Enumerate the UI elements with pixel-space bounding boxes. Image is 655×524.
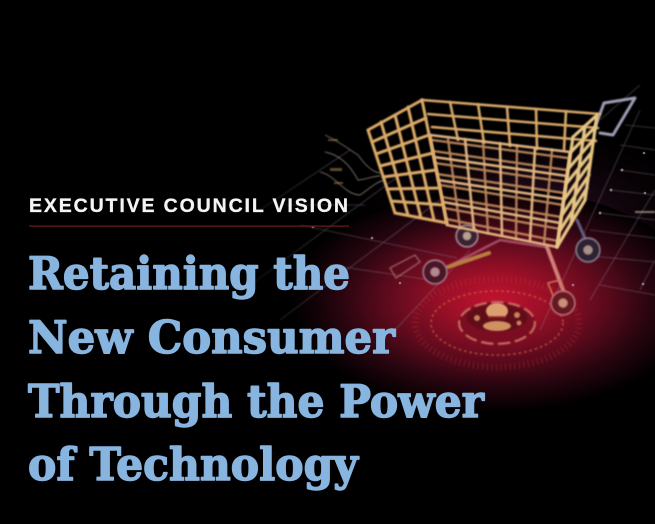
front wall bbox=[430, 135, 570, 247]
centre core bbox=[474, 303, 522, 331]
left fade bbox=[0, 0, 420, 524]
wheels bbox=[423, 225, 600, 315]
small data chips bbox=[328, 139, 655, 213]
inner disc bbox=[467, 305, 527, 331]
right wall bbox=[557, 115, 597, 247]
radial tick ring bbox=[415, 279, 579, 367]
target platform bbox=[415, 279, 579, 367]
red glow bbox=[200, 110, 655, 412]
eyebrow: executive council vision: EXECUTIVE COUNCIL VISION bbox=[29, 195, 348, 217]
dotted ring bbox=[431, 291, 563, 355]
perspective grid bbox=[230, 85, 655, 330]
cart chassis bbox=[390, 220, 588, 298]
circuit wires bbox=[320, 135, 385, 195]
title bbox=[28, 247, 485, 491]
title: New Consumer bbox=[28, 311, 396, 364]
handle bbox=[594, 98, 635, 135]
grid nodes bbox=[312, 152, 646, 286]
title: Retaining the bbox=[28, 247, 350, 300]
title: Through the Power bbox=[28, 375, 485, 428]
shopping cart bbox=[368, 98, 635, 315]
left wall bbox=[368, 100, 447, 223]
dark disc bbox=[459, 302, 535, 344]
interior mesh bbox=[432, 139, 568, 244]
title: of Technology bbox=[28, 438, 360, 491]
back wall bbox=[422, 100, 600, 150]
divider rule bbox=[29, 226, 349, 227]
